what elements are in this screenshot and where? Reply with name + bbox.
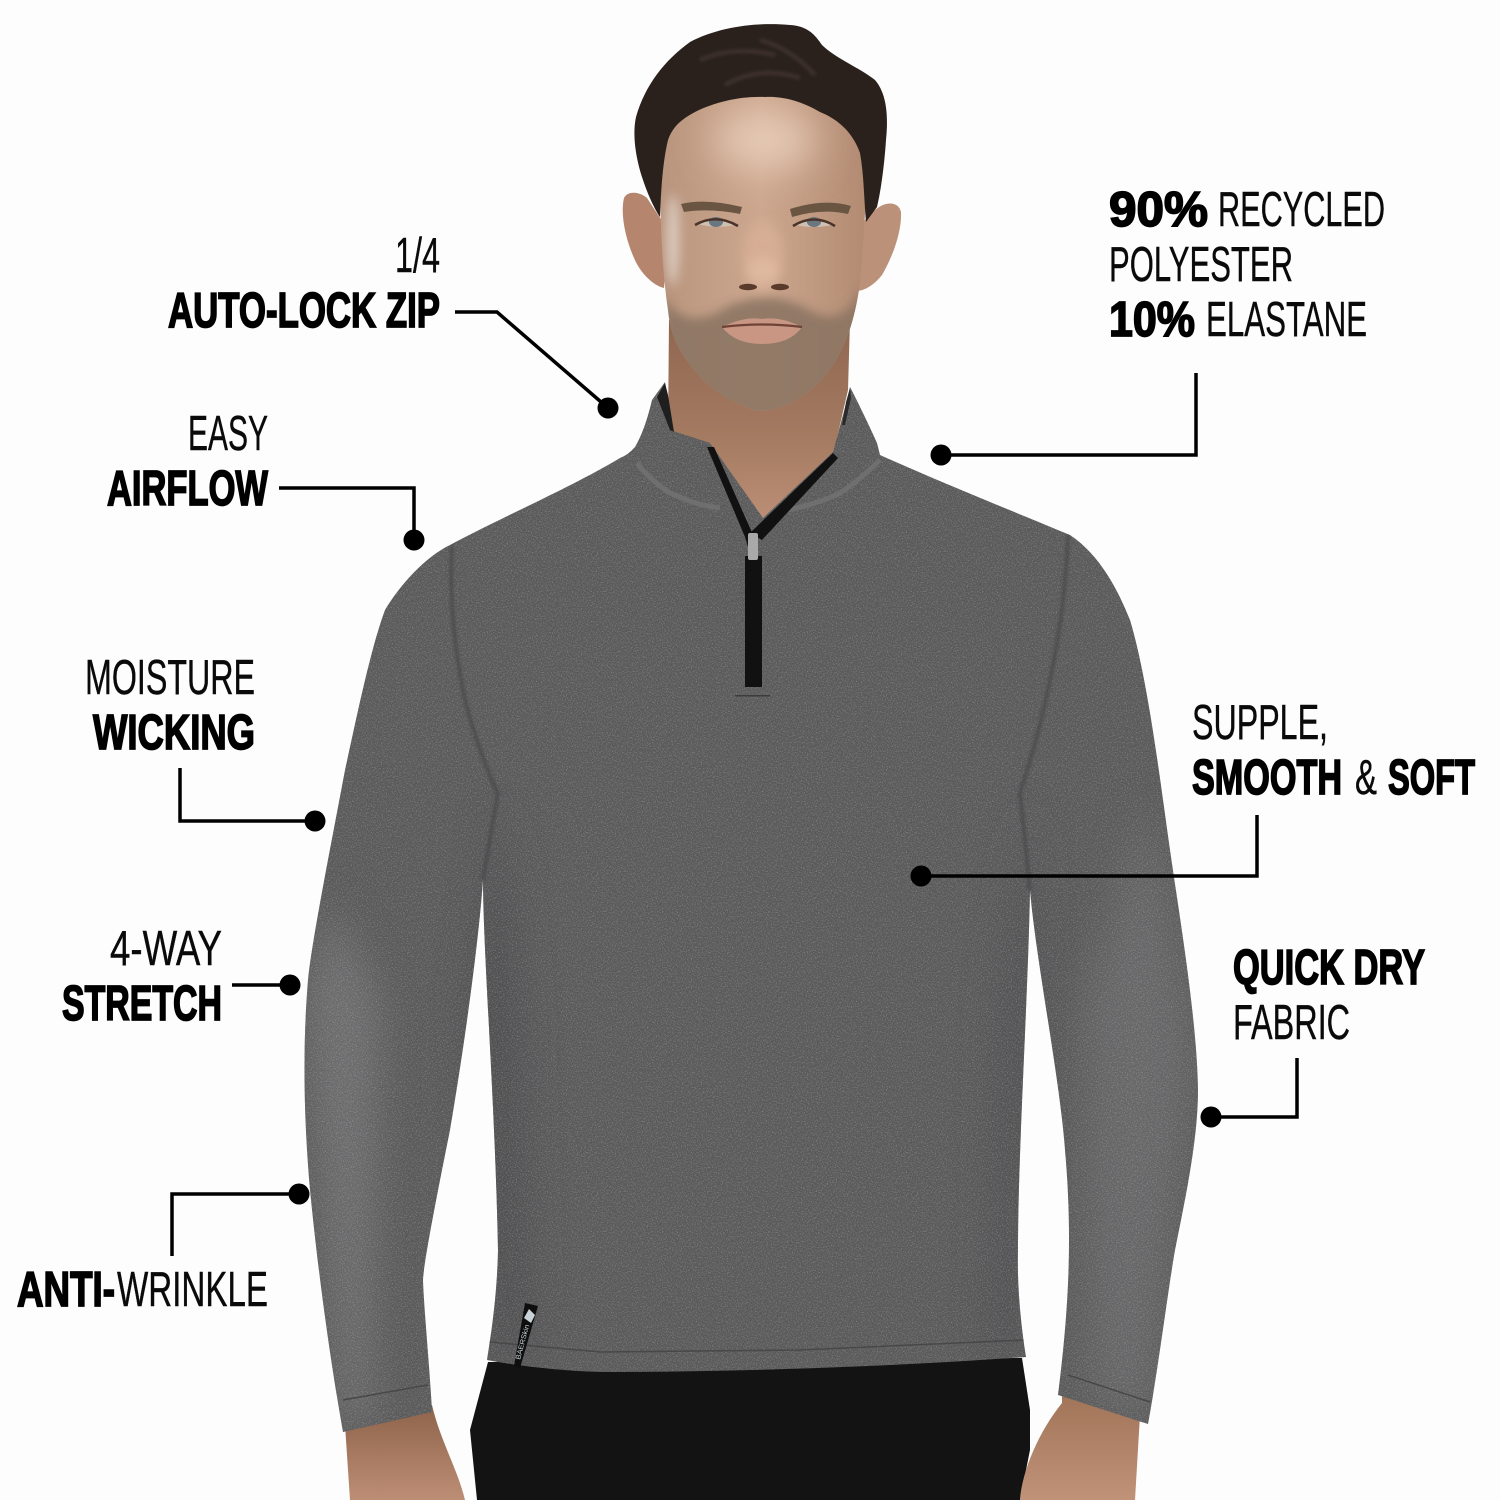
callout: fabric composition [930,183,1385,466]
figure: man wearing quarter-zip [290,24,1210,1500]
shirt [290,370,1210,1440]
heather texture [290,370,1210,1440]
callout: quick dry fabric: QUICK DRY [1233,941,1425,995]
callout: quick dry fabric: FABRIC [1233,996,1350,1050]
cheek highlight [666,195,680,285]
callout: moisture wicking [85,651,326,832]
hem stitching [343,1340,1150,1402]
right hand [1020,1390,1140,1500]
zipper pull [748,533,758,560]
callout: fabric composition: RECYCLED [1218,183,1385,237]
callout: fabric composition: POLYESTER [1109,238,1293,292]
callout: anti-wrinkle: ANTI- [17,1263,115,1317]
callout: moisture wicking: WICKING [93,706,255,760]
armhole seams [451,535,1068,890]
callout: supple, smooth and soft: SUPPLE, [1192,696,1328,750]
left ear [623,193,668,288]
hair [634,24,887,222]
sleeve and body shading [305,800,1195,1430]
callout: supple, smooth and soft [910,696,1475,886]
nose [739,221,789,290]
zipper placket [707,447,838,696]
stubble beard [666,290,859,411]
brand tag: BAERSkin [515,1324,531,1361]
mouth [722,318,802,344]
trousers [470,1358,1030,1500]
brand tag [514,1303,538,1368]
callout: 4-way stretch: STRETCH [62,977,222,1031]
callout: moisture wicking: MOISTURE [85,651,255,705]
callout: easy airflow: EASY [188,407,268,461]
callout: supple, smooth and soft: & [1355,751,1377,805]
collar shading and seam [637,383,880,510]
callout: 4-way stretch: 4-WAY [110,922,222,976]
callout: fabric composition: 90% [1109,183,1208,237]
neck [668,320,850,520]
callout: fabric composition: ELASTANE [1206,293,1367,347]
callout: 1/4 auto-lock zip: AUTO-LOCK ZIP [168,284,440,338]
callout: anti-wrinkle: WRINKLE [117,1263,268,1317]
callout: fabric composition: 10% [1109,293,1195,347]
callout: 4-way stretch [62,922,300,1031]
right ear [855,204,901,291]
callout: quick dry fabric [1200,941,1425,1128]
callout: anti-wrinkle [17,1184,310,1317]
callout: supple, smooth and soft: SMOOTH [1192,751,1342,805]
face [655,90,868,420]
callout: easy airflow [107,407,424,550]
left hand [345,1405,465,1500]
callout: 1/4 auto-lock zip [168,229,618,418]
callout: easy airflow: AIRFLOW [107,462,269,516]
eyebrows and eyes [681,202,851,227]
callout: 1/4 auto-lock zip: 1/4 [395,229,440,283]
